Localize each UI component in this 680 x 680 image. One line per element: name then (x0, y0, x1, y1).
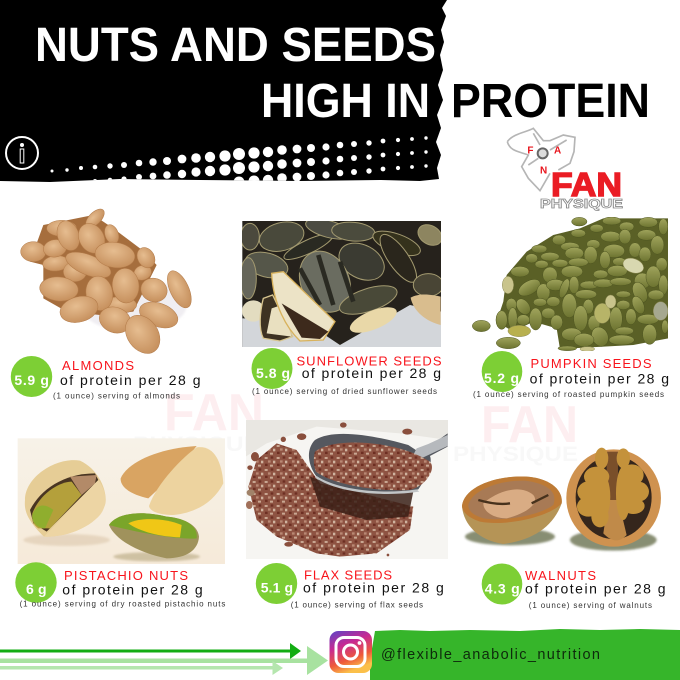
title: HIGH IN (261, 75, 430, 128)
photo: flax seeds (246, 420, 449, 560)
stat: pumpkin seeds: (1 ounce) serving of roasted pumpkin seeds (473, 390, 664, 399)
stat: flax seeds (256, 563, 444, 609)
logo: FAN Physique (507, 128, 623, 211)
stat: almonds: 5.9 g (14, 372, 49, 388)
stat: pistachio nuts: of protein per 28 g (62, 581, 203, 597)
photo: pumpkin seeds (472, 217, 668, 351)
spoon (309, 433, 448, 492)
stat: almonds: (1 ounce) serving of almonds (53, 392, 180, 401)
stat: sunflower seeds: SUNFLOWER SEEDS (296, 354, 442, 369)
watermark: right logo: FAN (481, 396, 578, 454)
halftone dots (50, 136, 428, 181)
stat: almonds (11, 356, 200, 401)
watermark: right logo: PHYSIQUE (453, 443, 578, 466)
watermark: right logo (453, 396, 578, 466)
footer banner (370, 629, 680, 680)
watermark: left logo: PHYSIQUE (133, 433, 260, 456)
stat: sunflower seeds (252, 348, 442, 396)
stat: walnuts: (1 ounce) serving of walnuts (529, 601, 652, 610)
stat: pumpkin seeds: of protein per 28 g (530, 370, 669, 386)
logo: FAN Physique: A (554, 145, 561, 156)
title (35, 19, 650, 128)
stat: pistachio nuts (15, 562, 225, 609)
icon: info (6, 137, 38, 169)
stat: pistachio nuts: PISTACHIO NUTS (64, 568, 188, 583)
stat: flax seeds: (1 ounce) serving of flax seeds (291, 600, 423, 609)
photo: sunflower seeds (240, 215, 446, 348)
stat: almonds: ALMONDS (62, 358, 134, 373)
left half shell (462, 477, 562, 544)
photo: pistachio nuts (18, 438, 225, 564)
logo: FAN Physique: F (527, 145, 533, 156)
left pistachio (25, 460, 106, 537)
stat: sunflower seeds: of protein per 28 g (302, 365, 441, 381)
arrow: dark green (0, 643, 301, 659)
icon: instagram (330, 631, 372, 673)
arrow: light green small (0, 661, 283, 675)
stat: pistachio nuts: (1 ounce) serving of dry roasted pistachio nuts (20, 600, 225, 609)
header banner: torn black panel (0, 0, 447, 188)
watermark: left logo (133, 384, 264, 456)
stat: walnuts: WALNUTS (525, 568, 596, 583)
green pistachio kernel (109, 513, 199, 558)
stat: flax seeds: FLAX SEEDS (304, 567, 392, 582)
photo: walnuts (462, 448, 661, 551)
logo: FAN Physique: FAN (551, 166, 622, 203)
logo: FAN Physique: N (540, 165, 547, 176)
arrow: light green large (0, 646, 328, 675)
right half shell (566, 449, 661, 547)
stat: almonds: of protein per 28 g (60, 372, 200, 388)
stat: flax seeds: of protein per 28 g (303, 580, 444, 596)
stat: pumpkin seeds: 5.2 g (484, 370, 519, 386)
stat: pistachio nuts: 6 g (26, 581, 47, 597)
stat: walnuts (482, 564, 666, 610)
logo: FAN Physique: PHYSIQUE (540, 196, 623, 211)
stat: flax seeds: 5.1 g (261, 580, 293, 596)
photo: almonds (21, 206, 196, 360)
stat: pumpkin seeds (473, 351, 669, 399)
stat: walnuts: 4.3 g (485, 580, 520, 596)
stat: walnuts: of protein per 28 g (525, 580, 666, 596)
title: NUTS AND SEEDS (35, 19, 436, 72)
stat: sunflower seeds: (1 ounce) serving of dried sunflower seeds (252, 387, 437, 396)
right pistachio (121, 446, 197, 498)
watermark: left logo: FAN (164, 384, 264, 442)
title: PROTEIN (451, 75, 650, 128)
handle: @flexible_anabolic_nutrition (381, 647, 600, 663)
stat: sunflower seeds: 5.8 g (256, 365, 290, 381)
stat: pumpkin seeds: PUMPKIN SEEDS (530, 356, 652, 371)
